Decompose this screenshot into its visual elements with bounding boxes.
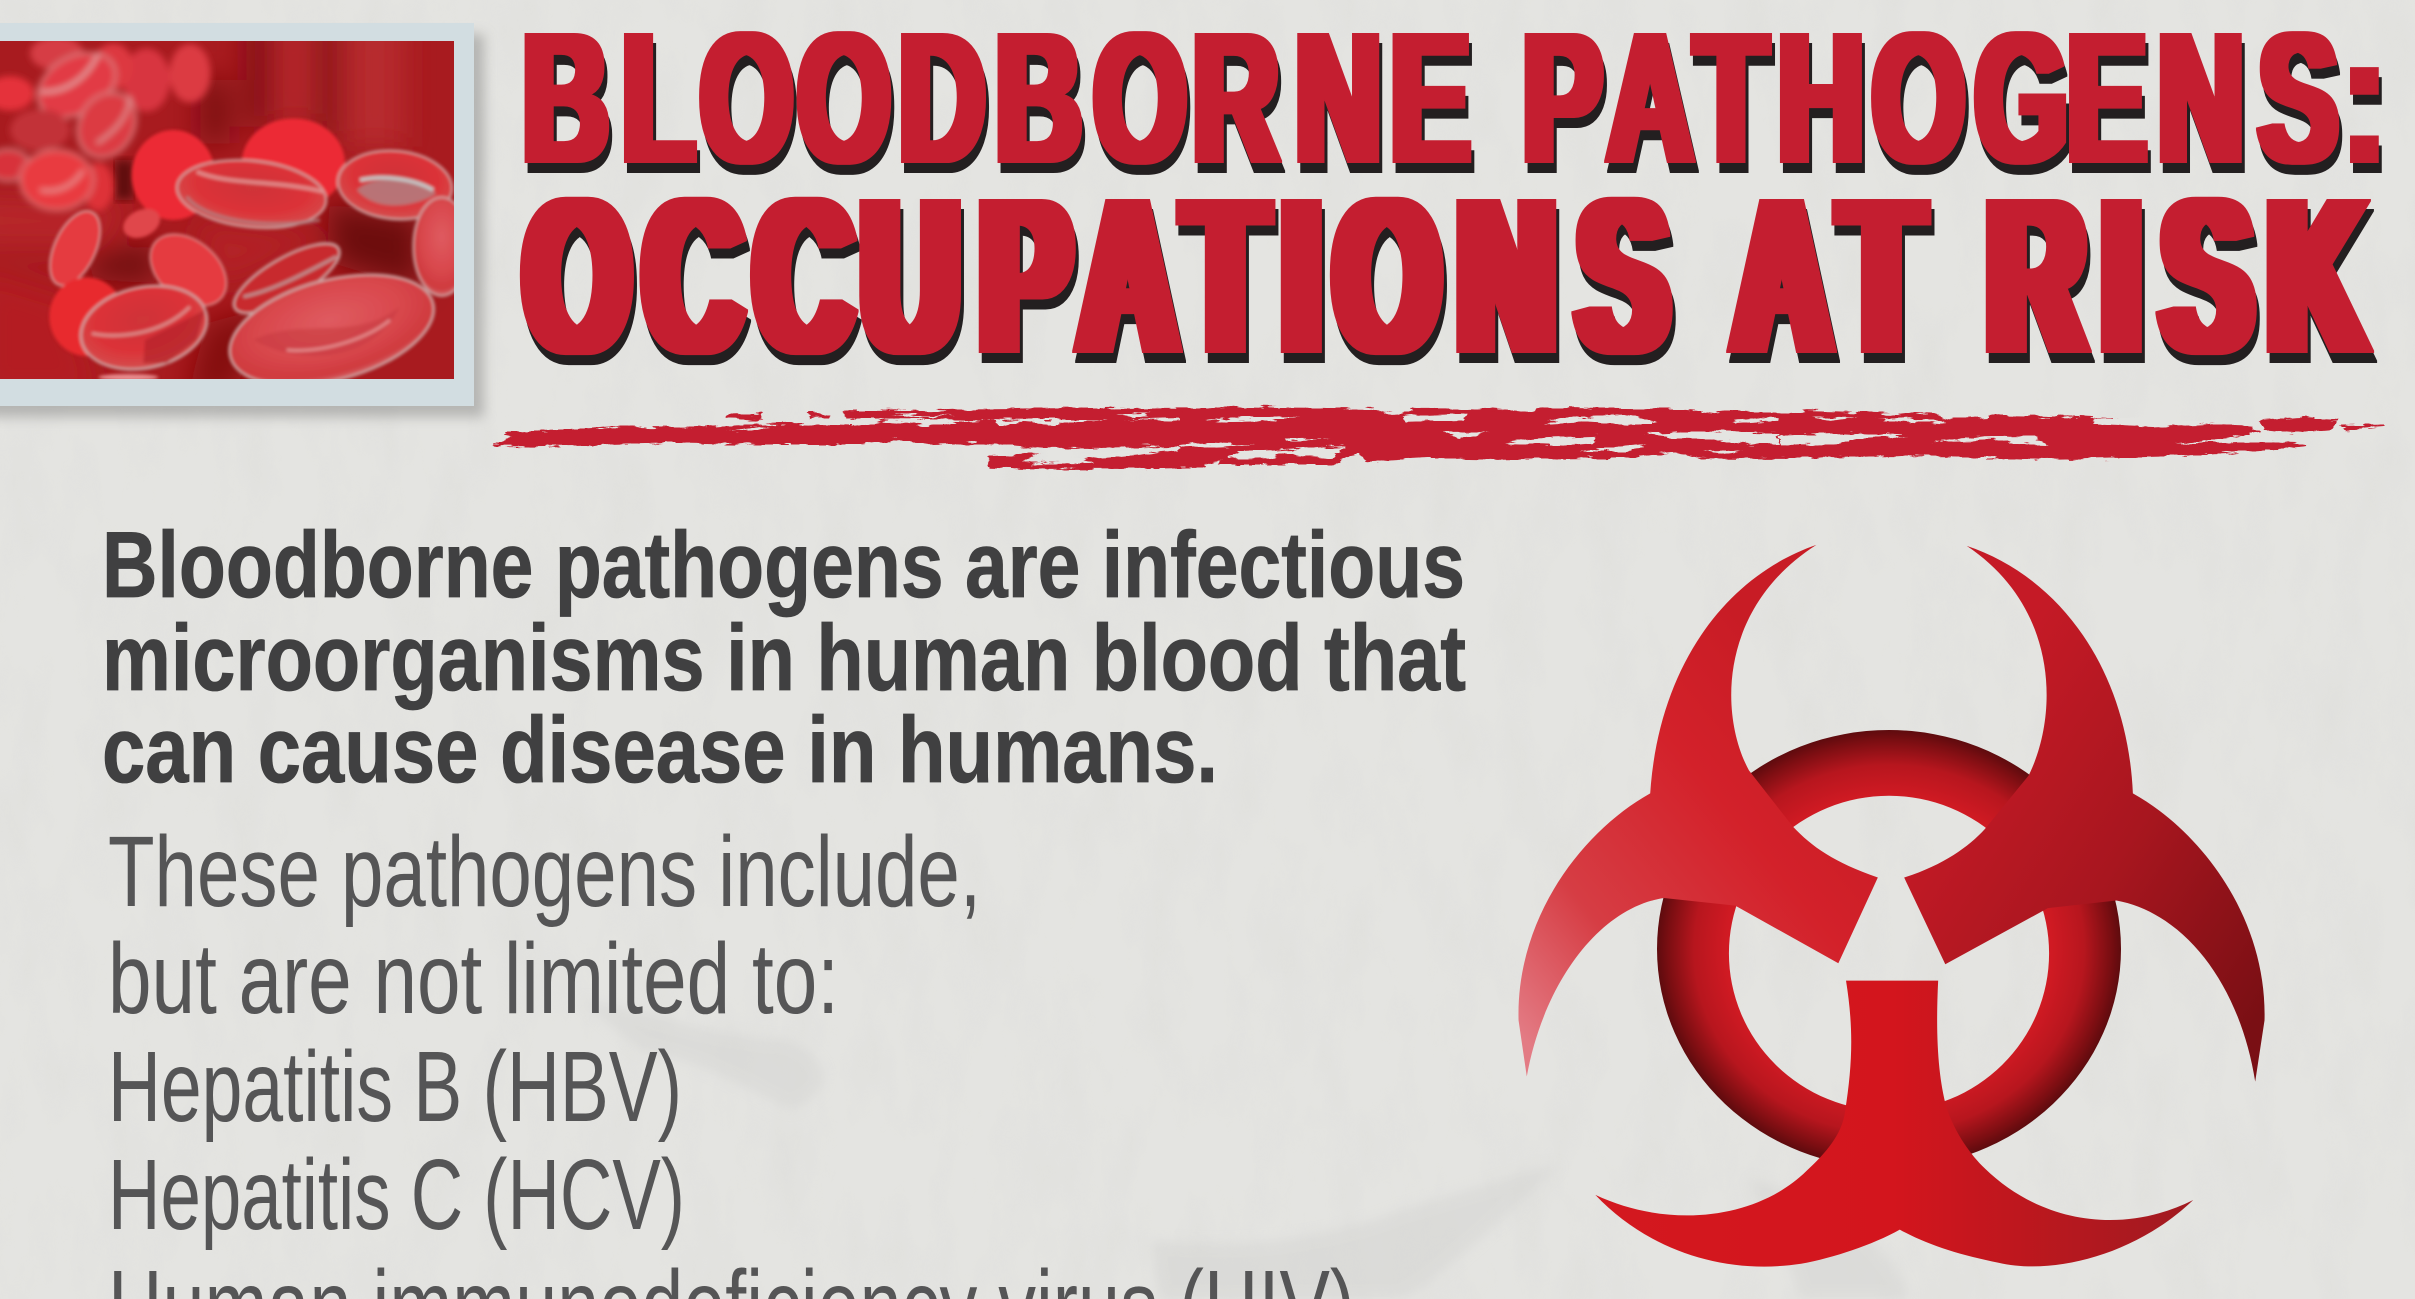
title line 2: OCCUPATIONS AT RISK bbox=[525, 152, 2364, 399]
red brush stroke divider bbox=[494, 408, 2385, 468]
icon: biohazard symbol bbox=[1518, 545, 2265, 1267]
biohazard right arm bbox=[1904, 546, 2265, 1082]
intro statement (bold) bbox=[102, 512, 1466, 802]
title line 1: BLOODBORNE PATHOGENS: bbox=[523, 0, 2384, 202]
pathogen list (light): but are not limited to: bbox=[108, 923, 839, 1035]
blood cell photo bbox=[0, 41, 454, 379]
intro statement (bold): microorganisms in human blood that bbox=[102, 605, 1466, 710]
frame shadow bbox=[0, 34, 484, 417]
faint background blood splatter bbox=[580, 1000, 1910, 1299]
intro statement (bold): Bloodborne pathogens are infectious bbox=[102, 512, 1465, 617]
biohazard bottom arm bbox=[1595, 981, 2193, 1267]
pathogen list (light): Hepatitis C (HCV) bbox=[108, 1139, 685, 1251]
frame border bbox=[0, 23, 474, 406]
intro statement (bold): can cause disease in humans. bbox=[102, 697, 1218, 802]
pathogen list (light): Hepatitis B (HBV) bbox=[108, 1031, 682, 1143]
biohazard left arm bbox=[1518, 545, 1878, 1077]
focused cells bbox=[242, 118, 345, 208]
title: two lines with drop shadow bbox=[523, 0, 2384, 399]
biohazard ring bbox=[1657, 730, 2121, 1168]
photo frame: red blood cells bbox=[0, 20, 484, 417]
blurred cell cluster, upper left bbox=[0, 37, 211, 211]
pathogen list (light) bbox=[108, 816, 1355, 1299]
pathogen list (light): These pathogens include, bbox=[108, 816, 981, 928]
